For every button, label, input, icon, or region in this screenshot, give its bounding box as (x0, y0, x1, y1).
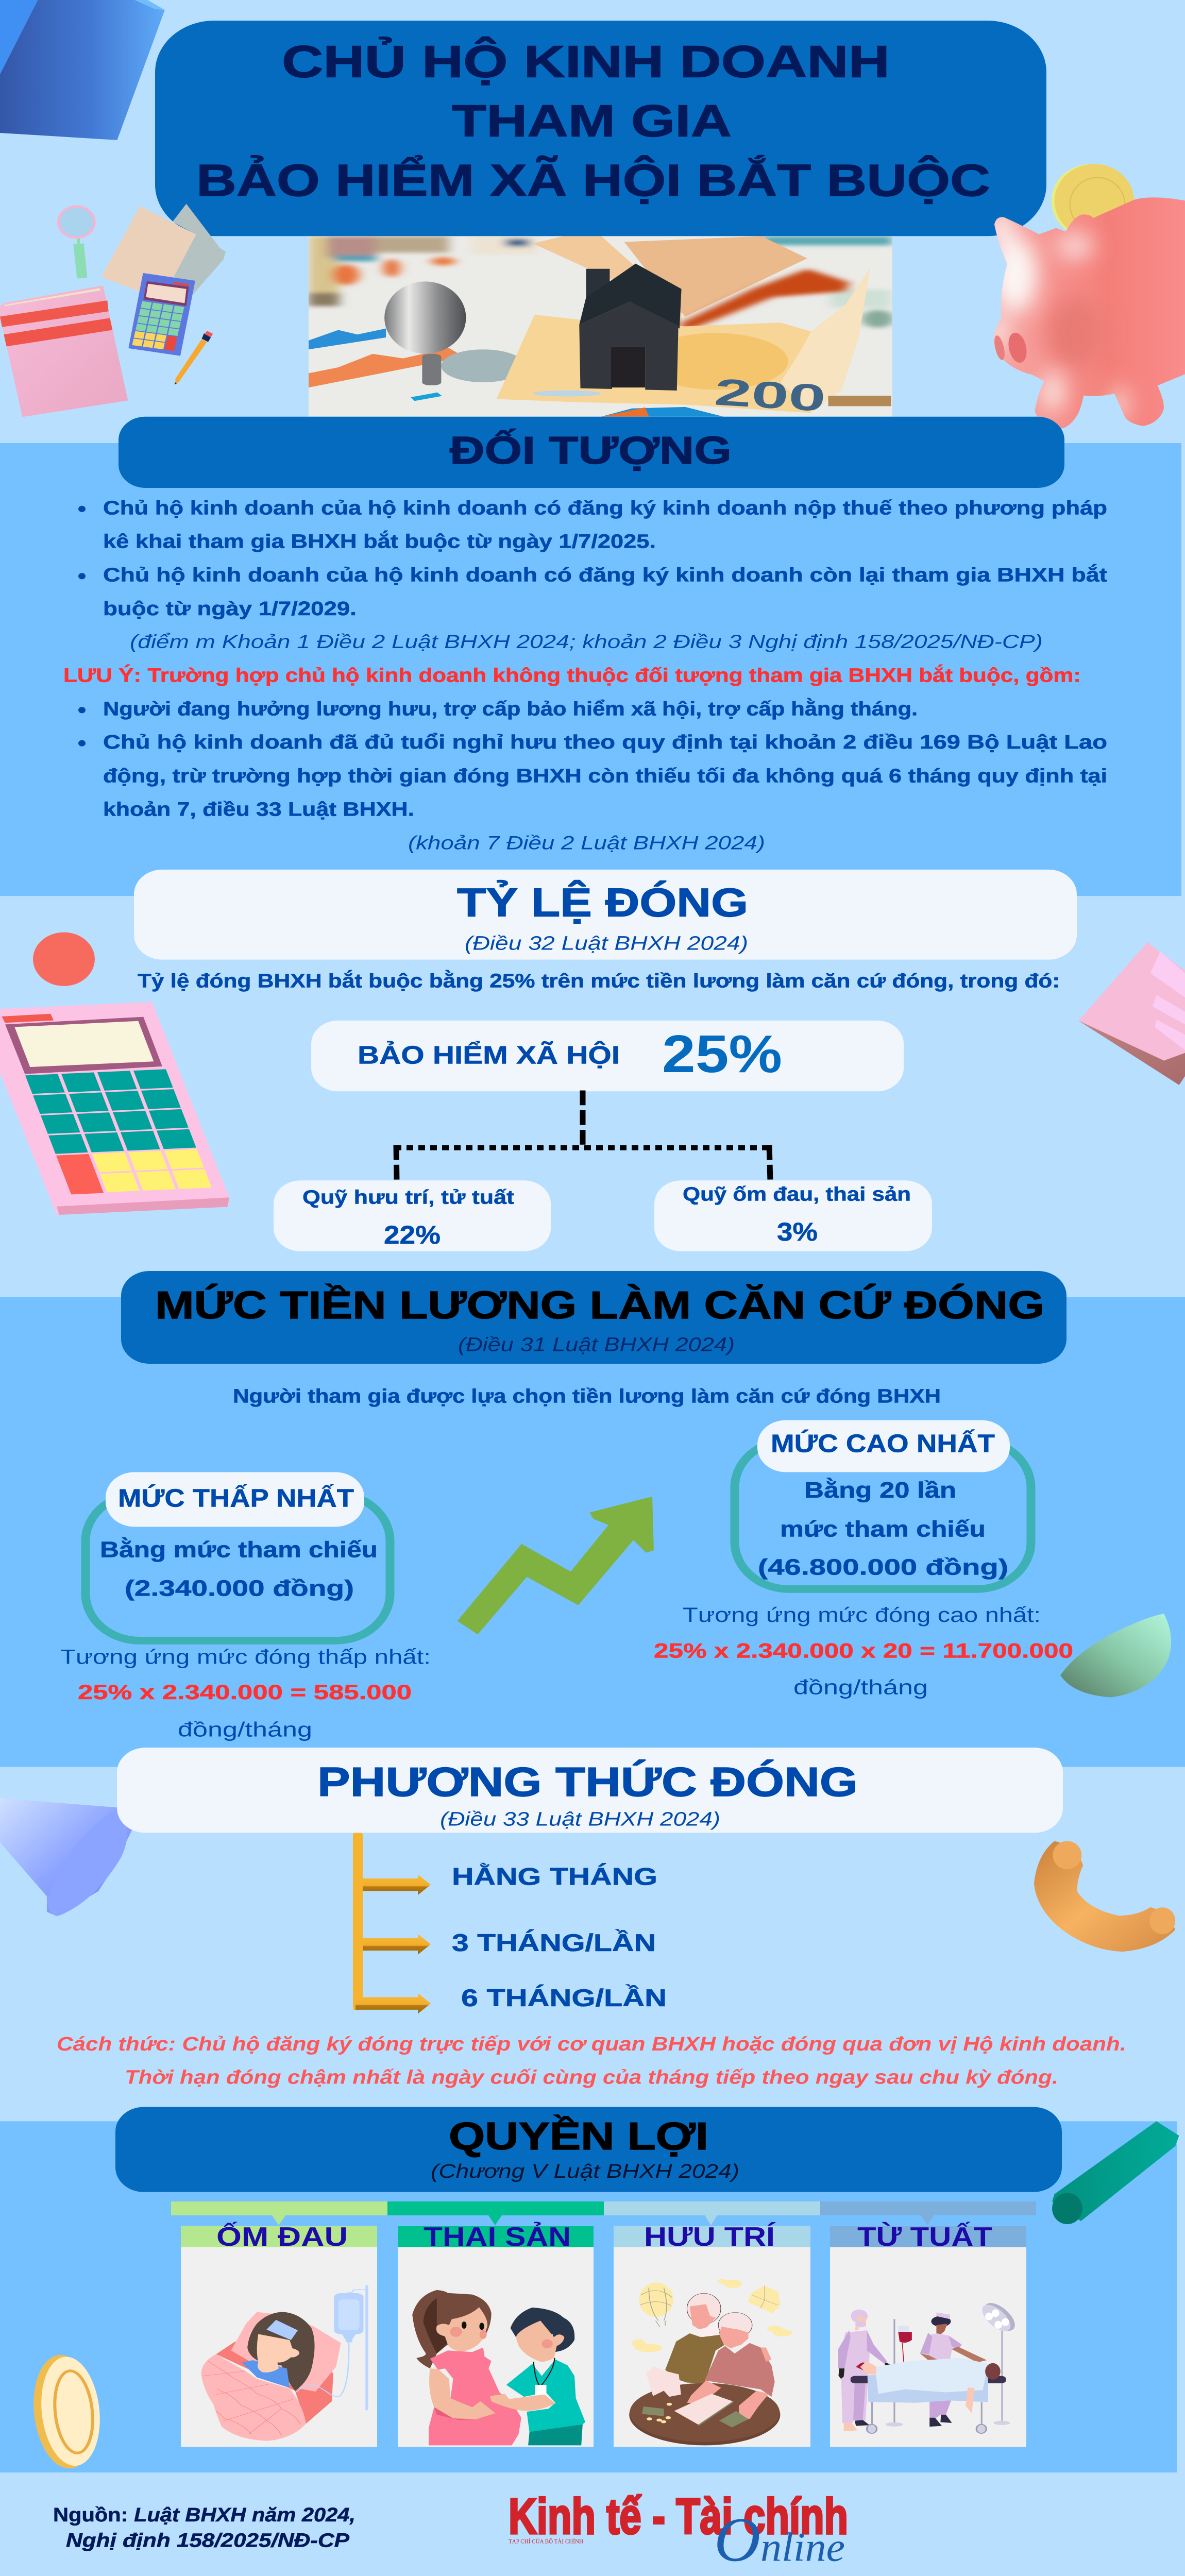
source line 2: Nghị định 158/2025/NĐ-CP (66, 2529, 350, 2551)
formula: 585.000: 25% x 2.340.000 = 585.000 (78, 1681, 412, 1704)
card header: hưu trí (614, 2226, 810, 2247)
card label: thai sản: THAI SẢN (424, 2222, 571, 2251)
text: tương ứng thấp nhất (60, 1646, 431, 1741)
illustration: sick woman with IV drip (201, 2285, 368, 2441)
icon: large pink calculator (0, 1002, 229, 1215)
section heading: Phương thức đóng (117, 1748, 1063, 1833)
text: trường hợp 2 line 3: khoản 7, điều 33 Luật BHXH. (103, 798, 414, 820)
icon: gold coin (28, 2352, 105, 2471)
unit: đồng/tháng: đồng/tháng (793, 1676, 928, 1699)
section heading: Quyền lợi (115, 2107, 1062, 2192)
logo: Kinh tế - Tài chính Online (509, 2488, 848, 2574)
text: tương ứng cao nhất (654, 1604, 1073, 1699)
box: quỹ hưu trí, tử tuất (274, 1180, 551, 1251)
text: bằng mức tham chiếu: Bằng mức tham chiếu (100, 1537, 378, 1562)
title line 2: THAM GIA (452, 95, 732, 146)
card: mức cao nhất (735, 1420, 1031, 1589)
arrow: 3 tháng (363, 1934, 431, 1955)
card: tử tuất (830, 2222, 1026, 2447)
icon: small calculator (128, 273, 195, 356)
intro text: tỷ lệ đóng: Tỷ lệ đóng BHXH bắt buộc bằng 25% trên mức tiền lương làm căn cứ đóng, trong đó: (138, 970, 1060, 992)
diagram: ruler arrows for payment frequency (353, 1833, 431, 2014)
bullet 4 (78, 740, 86, 747)
icon: magnifying glass (59, 207, 94, 279)
option: 3 tháng/lần: 3 THÁNG/LẦN (452, 1929, 656, 1956)
option: hằng tháng: HẰNG THÁNG (452, 1863, 657, 1890)
section heading: Phương thức đóng: PHƯƠNG THỨC ĐÓNG (317, 1759, 858, 1805)
number: 25%: 25% (662, 1025, 782, 1083)
icon: teal cylinder (1052, 2121, 1179, 2224)
icon: blue cone (0, 1798, 132, 1916)
icon: orange macaroni (1034, 1841, 1175, 1952)
citation: chương V: (Chương V Luật BHXH 2024) (431, 2160, 739, 2182)
section heading: Mức tiền lương (121, 1271, 1066, 1364)
title banner (155, 21, 1046, 236)
text: tương ứng cao nhất: Tương ứng mức đóng cao nhất: (683, 1604, 1041, 1626)
bullet 2 (78, 573, 86, 579)
connector: dashed tree lines (395, 1091, 772, 1181)
section heading: Tỷ lệ đóng: TỶ LỆ ĐÓNG (457, 879, 748, 925)
icon: mint bowl (1060, 1614, 1171, 1697)
title line 1: CHỦ HỘ KINH DOANH (282, 37, 890, 87)
section heading: Tỷ lệ đóng (134, 870, 1077, 960)
card: mức thấp nhất (86, 1472, 390, 1640)
source line (53, 2504, 356, 2551)
note: thời hạn: Thời hạn đóng chậm nhất là ngày cuối cùng của tháng tiếp theo ngay sau chu kỳ đóng. (125, 2066, 1058, 2088)
text: đối tượng line 4: buộc từ ngày 1/7/2029. (103, 598, 357, 619)
section heading: Quyền lợi: QUYỀN LỢI (449, 2115, 708, 2158)
card header: thai sản (398, 2226, 594, 2247)
box: quỹ hưu trí, tử tuất: Quỹ hưu trí, tử tuất (302, 1186, 514, 1208)
card header: ốm đau (181, 2226, 377, 2247)
ribbon: colour bars with pointers (171, 2201, 1036, 2225)
illustration: surgery scene (838, 2301, 1021, 2433)
text: 2.340.000 đồng: (2.340.000 đồng) (125, 1575, 354, 1601)
icon: pencil (175, 331, 213, 384)
text: trường hợp 2 line 2: động, trừ trường hợp thời gian đóng BHXH còn thiếu tối đa không quá 6 tháng quy định tại (103, 765, 1107, 787)
number: 22%: 22% (384, 1220, 441, 1249)
label: mức thấp nhất: MỨC THẤP NHẤT (118, 1484, 354, 1512)
logo script: Online: Online (714, 2505, 845, 2574)
card: ốm đau (181, 2222, 377, 2447)
note: cách thức: Cách thức: Chủ hộ đăng ký đóng trực tiếp với cơ quan BHXH hoặc đóng qua đơn vị Hộ kinh doanh. (57, 2033, 1126, 2055)
icon: piggy bank with coin (986, 164, 1185, 429)
red note: LƯU Ý: Trường hợp chủ hộ kinh doanh không thuộc đối tượng tham gia BHXH bắt buộc, gồm: (63, 664, 1081, 686)
band: mức tiền lương background (0, 1297, 1185, 1767)
text: đối tượng line 2: kê khai tham gia BHXH bắt buộc từ ngày 1/7/2025. (103, 530, 656, 552)
text: bằng 20 lần: Bằng 20 lần (804, 1478, 956, 1502)
text: trường hợp 1: Người đang hưởng lương hưu, trợ cấp bảo hiểm xã hội, trợ cấp hằng tháng. (103, 698, 918, 720)
box: quỹ ốm đau, thai sản: Quỹ ốm đau, thai sản (683, 1183, 911, 1205)
panel: đối tượng text (63, 497, 1107, 854)
box: quỹ ốm đau, thai sản (654, 1180, 932, 1251)
illustration: pregnant woman and nurse (412, 2290, 585, 2445)
icon: pink book (0, 285, 128, 417)
label: mức cao nhất: MỨC CAO NHẤT (771, 1430, 995, 1458)
text: đối tượng line 3: Chủ hộ kinh doanh của hộ kinh doanh có đăng ký kinh doanh còn lại tham gia BHXH bắt (103, 564, 1107, 586)
card: hưu trí (614, 2222, 810, 2447)
citation: điều 33: (Điều 33 Luật BHXH 2024) (440, 1808, 720, 1830)
box: bảo hiểm xã hội 25% (311, 1021, 904, 1091)
text: tương ứng thấp nhất: Tương ứng mức đóng thấp nhất: (60, 1646, 431, 1669)
pill: mức cao nhất (757, 1420, 1010, 1472)
text: mức tham chiếu: mức tham chiếu (780, 1517, 986, 1541)
citation: điều 31: (Điều 31 Luật BHXH 2024) (458, 1333, 735, 1355)
section heading: Đối tượng: ĐỐI TƯỢNG (450, 429, 732, 472)
box: bảo hiểm xã hội 25%: BẢO HIỂM XÃ HỘI (358, 1040, 620, 1069)
arrow: 6 tháng (356, 1993, 431, 2014)
title line 3: BẢO HIỂM XÃ HỘI BẮT BUỘC (196, 155, 990, 206)
icon: folder with papers (101, 204, 226, 294)
citation: khoản 7: (khoản 7 Điều 2 Luật BHXH 2024) (408, 832, 765, 854)
logo tagline: TẠP CHÍ CỦA BỘ TÀI CHÍNH (509, 2538, 583, 2545)
number: 3%: 3% (777, 1217, 818, 1246)
logo: Kinh tế - Tài chính Online: Kinh tế - Tài chính (509, 2488, 848, 2545)
arrow: hằng tháng (363, 1874, 431, 1895)
source line: Nguồn: Luật BHXH năm 2024, (53, 2504, 356, 2526)
formula: 11.700.000: 25% x 2.340.000 x 20 = 11.700.000 (654, 1639, 1073, 1663)
pill: mức thấp nhất (106, 1472, 364, 1527)
icon: green rising arrow (458, 1497, 654, 1634)
card label: ốm đau: ỐM ĐAU (216, 2222, 348, 2251)
photo text: banknote 200: 200 (713, 370, 827, 419)
unit: đồng/tháng: đồng/tháng (178, 1718, 312, 1741)
citation: điều 32: (Điều 32 Luật BHXH 2024) (465, 932, 748, 954)
band: đối tượng background (0, 443, 1181, 896)
text: đối tượng line 1: Chủ hộ kinh doanh của hộ kinh doanh có đăng ký kinh doanh nộp thuế theo phương pháp (103, 497, 1107, 519)
icon: blue cube (0, 0, 165, 140)
bullet 3 (78, 707, 86, 713)
card label: hưu trí: HƯU TRÍ (644, 2222, 775, 2251)
icon: red ball (33, 933, 95, 986)
section heading: Đối tượng (118, 417, 1064, 488)
citation: điểm m khoản 1: (điểm m Khoản 1 Điều 2 Luật BHXH 2024; khoản 2 Điều 3 Nghị định 158/2025/NĐ-CP) (130, 631, 1043, 653)
section heading: Mức tiền lương: MỨC TIỀN LƯƠNG LÀM CĂN CỨ ĐÓNG (155, 1284, 1044, 1327)
card header: tử tuất (830, 2226, 1026, 2247)
illustration: elderly couple at table (629, 2279, 792, 2445)
band: quyền lợi background (0, 2121, 1177, 2472)
icon: pink stair shape (1078, 942, 1185, 1085)
card label: tử tuất: TỪ TUẤT (857, 2222, 992, 2251)
bullet 1 (78, 506, 86, 512)
header photo: house model and banknotes (309, 236, 894, 417)
option: 6 tháng/lần: 6 THÁNG/LẦN (461, 1984, 667, 2011)
card: thai sản (398, 2222, 594, 2447)
text: trường hợp 2 line 1: Chủ hộ kinh doanh đã đủ tuổi nghỉ hưu theo quy định tại khoản 2 điều 169 Bộ Luật Lao (103, 731, 1107, 753)
intro text: lựa chọn tiền lương: Người tham gia được lựa chọn tiền lương làm căn cứ đóng BHXH (233, 1385, 941, 1407)
text: 46.800.000 đồng: (46.800.000 đồng) (758, 1555, 1008, 1580)
